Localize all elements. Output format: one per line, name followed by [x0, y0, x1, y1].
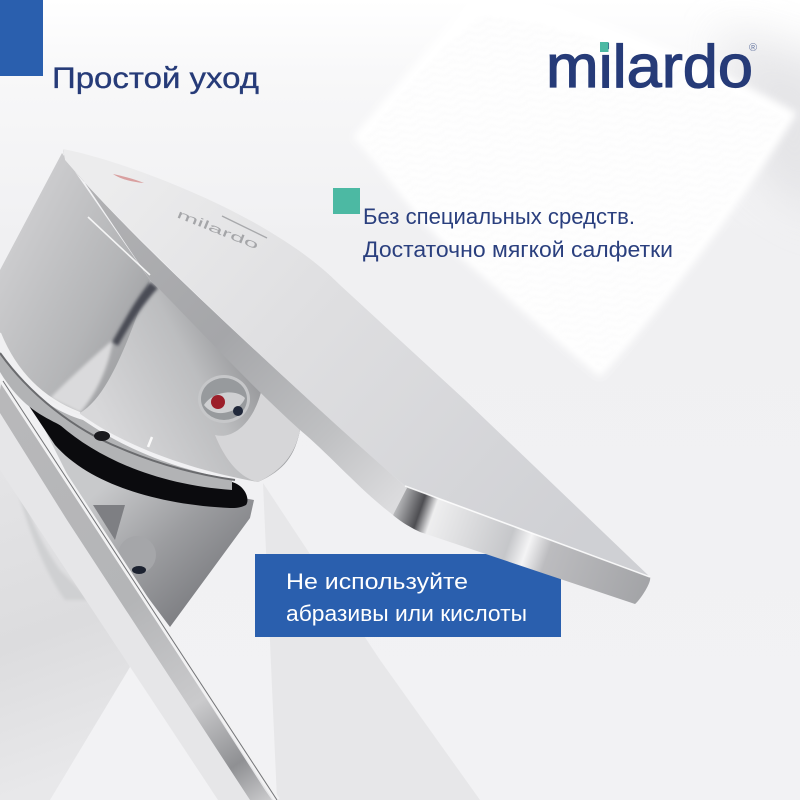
- logo: milardo: ®: [749, 42, 757, 54]
- lower valve body: [45, 430, 254, 627]
- icon: red hot mark: [113, 174, 144, 183]
- faucet handle body: [0, 153, 158, 413]
- text: soft cloth note: [363, 204, 673, 262]
- text: soft cloth note: Без специальных средств.: [363, 204, 635, 229]
- stem chrome band: [0, 377, 277, 800]
- faucet cylinder body: [75, 280, 300, 482]
- engraved brand on lever: milardo: [175, 207, 261, 253]
- towel photo: [353, 0, 797, 377]
- reflecting surface under the faucet: [263, 483, 480, 800]
- faucet stem: [0, 377, 277, 800]
- callout: no abrasives: абразивы или кислоты: [286, 601, 527, 626]
- stem front face: [0, 405, 130, 800]
- icon: blue cold mark: [222, 216, 267, 238]
- callout: no abrasives: Не используйте: [286, 569, 468, 594]
- lever tip chrome edge: [393, 486, 650, 604]
- faucet base ring: [0, 353, 247, 508]
- faucet handle lever: [63, 149, 650, 604]
- lever top surface: [63, 149, 650, 577]
- callout: no abrasives: [255, 554, 561, 637]
- ring: silver plate: [0, 353, 232, 490]
- ring: black shadow: [23, 397, 247, 508]
- icon: temperature knob: [198, 375, 250, 423]
- accent square: teal: [333, 188, 360, 214]
- text: soft cloth note: Достаточно мягкой салфетки: [363, 237, 673, 262]
- accent square: top left: [0, 0, 43, 76]
- logo: milardo: milardo: [546, 33, 753, 100]
- lever side band: [63, 150, 407, 515]
- stem grey stripe: [0, 380, 272, 800]
- title: Простой уход: [52, 62, 259, 95]
